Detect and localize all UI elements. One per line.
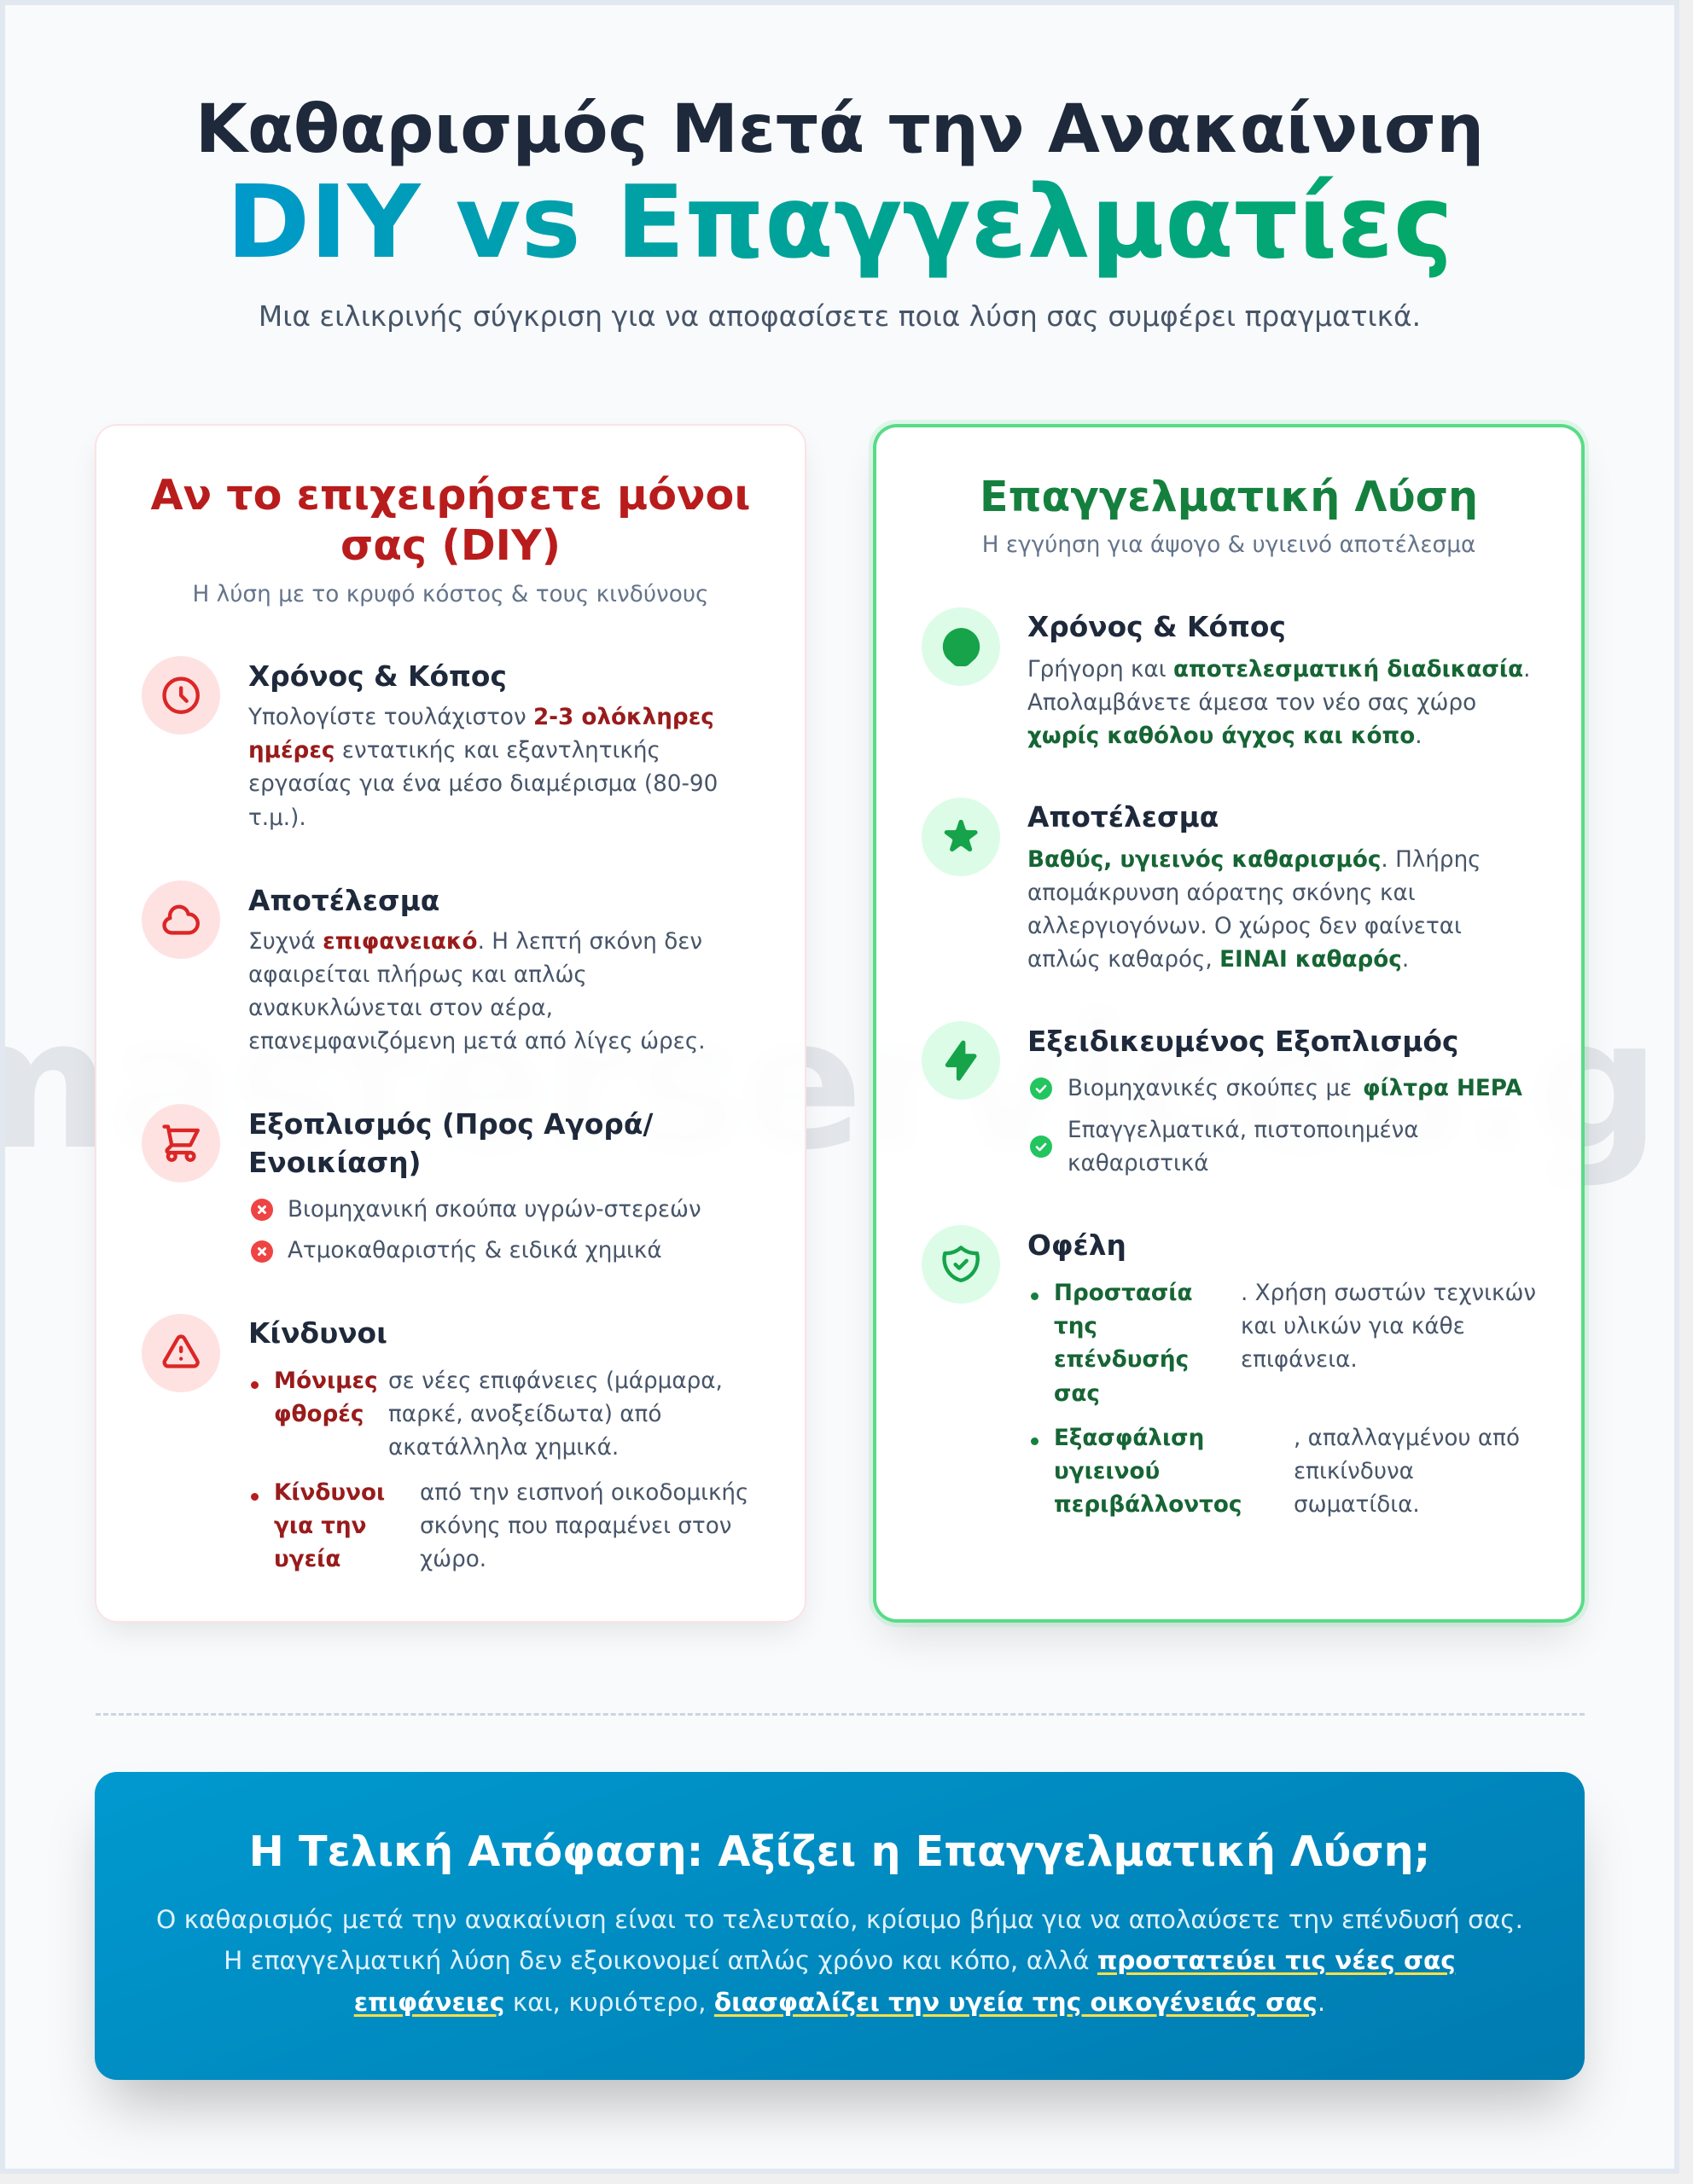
- text: result: απομάκρυνση αόρατης σκόνης και: [1027, 880, 1416, 906]
- callout text: επιφάνειες και, κυριότερο, διασφαλίζει την υγεία της οικογένειάς σας.: [354, 1988, 1325, 2017]
- bullet two: bold: για την: [274, 1513, 366, 1539]
- title: line one: Καθαρισμός Μετά την Ανακαίνιση: [195, 90, 1484, 168]
- heading: specialised equipment: Εξειδικευμένος Εξοπλισμός: [1027, 1025, 1458, 1058]
- bullet two: bold: περιβάλλοντος: [1054, 1492, 1242, 1518]
- bullet one: text: [1241, 1281, 1536, 1373]
- icon: shield: [922, 1225, 1000, 1304]
- heading: result: Αποτέλεσμα: [1027, 801, 1219, 834]
- bullet two: text: , απαλλαγμένου από: [1294, 1426, 1520, 1451]
- bullet one: text: [388, 1368, 723, 1461]
- heading: risks: Κίνδυνοι: [248, 1317, 387, 1350]
- text: result: [248, 928, 706, 1054]
- list item: certified detergents: [1068, 1118, 1419, 1176]
- bullet one: text: σε νέες επιφάνειες (μάρμαρα,: [388, 1368, 723, 1394]
- text: time and effort: [1027, 657, 1530, 749]
- text: result: επανεμφανιζόμενη μετά από λίγες ώρες.: [248, 1029, 706, 1054]
- text: result: [1027, 846, 1481, 973]
- text: time and effort: [248, 705, 718, 831]
- bullet two: text: από την εισπνοή οικοδομικής: [420, 1480, 748, 1506]
- icon: x two: [251, 1240, 273, 1263]
- text: time and effort: Απολαμβάνετε άμεσα τον νέο σας χώρο: [1027, 690, 1476, 716]
- icon: check two: [1030, 1136, 1052, 1158]
- bullet two: bold: [1054, 1426, 1242, 1518]
- bullet one: bold: της: [1054, 1314, 1097, 1339]
- icon: star: [922, 798, 1000, 876]
- icon: check one: [1030, 1077, 1052, 1100]
- heading: equipment: Ενοικίαση): [248, 1147, 422, 1179]
- heading: time and effort: Χρόνος & Κόπος: [1027, 611, 1286, 643]
- subtitle: Μια ειλικρινής σύγκριση για να αποφασίσετε ποια λύση σας συμφέρει πραγματικά.: [259, 300, 1421, 333]
- text: result: αφαιρείται πλήρως και απλώς: [248, 962, 587, 988]
- bullet two: text: σκόνης που παραμένει στον: [420, 1513, 731, 1539]
- icon: clock: [142, 656, 220, 735]
- bullet one: bold: [1054, 1281, 1193, 1407]
- panel: professional: φίλτρα HEPA: [1363, 1076, 1522, 1101]
- icon: x one: [251, 1199, 273, 1221]
- callout heading: Η Τελική Απόφαση: Αξίζει η Επαγγελματική Λύση;: [249, 1827, 1430, 1876]
- bullet one: bold: Προστασία: [1054, 1281, 1193, 1306]
- panel heading: professional: Επαγγελματική Λύση: [980, 472, 1478, 521]
- heading: equipment: Εξοπλισμός (Προς Αγορά/: [248, 1107, 653, 1140]
- icon: droplet: [922, 607, 1000, 686]
- heading: result: Αποτέλεσμα: [248, 884, 439, 916]
- panel: professional: [876, 427, 1581, 1619]
- panel heading: DIY: Αν το επιχειρήσετε μόνοι: [150, 469, 751, 519]
- text: time and effort: χωρίς καθόλου άγχος και κόπο.: [1027, 723, 1422, 749]
- heading: equipment: [248, 1107, 654, 1179]
- panel: DIY: [96, 426, 805, 1621]
- heading: time and effort: Χρόνος & Κόπος: [248, 660, 507, 693]
- callout text: [156, 1905, 1523, 2017]
- bullet two: bold: Εξασφάλιση: [1054, 1426, 1204, 1451]
- list item: HEPA vacuums: Βιομηχανικές σκούπες με: [1068, 1076, 1352, 1101]
- bullet one: text: επιφάνεια.: [1241, 1347, 1358, 1373]
- bullet two: text: σωματίδια.: [1294, 1492, 1420, 1518]
- panel subtitle: professional: Η εγγύηση για άψογο & υγιεινό αποτέλεσμα: [982, 532, 1475, 558]
- callout: final decision: [95, 1772, 1585, 2080]
- bullet one: bold: σας: [1054, 1381, 1100, 1407]
- panel heading: DIY: σας (DIY): [340, 520, 561, 570]
- bullet one: text: παρκέ, ανοξείδωτα) από: [388, 1402, 661, 1427]
- list item: certified detergents: καθαριστικά: [1068, 1151, 1209, 1176]
- text: result: αλλεργιογόνων. Ο χώρος δεν φαίνεται: [1027, 914, 1462, 939]
- text: result: ανακυκλώνεται στον αέρα,: [248, 996, 553, 1021]
- text: result: απλώς καθαρός, ΕΙΝΑΙ καθαρός.: [1027, 947, 1409, 973]
- text: time and effort: ημέρες εντατικής και εξαντλητικής: [248, 738, 660, 764]
- bullet one: bold: φθορές: [274, 1402, 364, 1427]
- list item: certified detergents: Επαγγελματικά, πιστοποιημένα: [1068, 1118, 1419, 1143]
- bullet two: bold: Κίνδυνοι: [274, 1480, 385, 1506]
- bullet one: bold: επένδυσής: [1054, 1347, 1189, 1373]
- bullet one: bold: Μόνιμες: [274, 1368, 378, 1394]
- bullet two: text: χώρο.: [420, 1547, 486, 1572]
- list item: vacuum: Βιομηχανική σκούπα υγρών-στερεών: [288, 1197, 701, 1223]
- heading: benefits: Οφέλη: [1027, 1228, 1126, 1261]
- text: result: Συχνά επιφανειακό. Η λεπτή σκόνη δεν: [248, 928, 702, 954]
- icon: warning: [142, 1314, 220, 1392]
- bullet one: [251, 1381, 259, 1389]
- bullet one: text: ακατάλληλα χημικά.: [388, 1435, 619, 1461]
- bullet two: bold: [274, 1480, 385, 1572]
- panel subtitle: DIY: Η λύση με το κρυφό κόστος & τους κινδύνους: [193, 582, 708, 607]
- title: gradient line two: DIY vs Επαγγελματίες: [226, 163, 1453, 281]
- callout text: Η επαγγελματική λύση δεν εξοικονομεί απλώς χρόνο και κόπο, αλλά προστατεύει τις νέες σας: [224, 1946, 1456, 1975]
- bullet two: [1031, 1438, 1038, 1445]
- bullet two: text: [1294, 1426, 1520, 1518]
- callout text: Ο καθαρισμός μετά την ανακαίνιση είναι το τελευταίο, κρίσιμο βήμα για να απολαύσετε την επένδυσή σας.: [156, 1905, 1523, 1934]
- text: time and effort: Υπολογίστε τουλάχιστον 2-3 ολόκληρες: [248, 705, 714, 730]
- bullet one: text: . Χρήση σωστών τεχνικών: [1241, 1281, 1536, 1306]
- bullet one: text: και υλικών για κάθε: [1241, 1314, 1465, 1339]
- bullet two: bold: υγιεινού: [1054, 1459, 1160, 1484]
- text: time and effort: Γρήγορη και αποτελεσματική διαδικασία.: [1027, 657, 1530, 682]
- bullet two: text: επικίνδυνα: [1294, 1459, 1414, 1484]
- bullet two: bold: υγεία: [274, 1547, 340, 1572]
- bullet one: [1031, 1292, 1038, 1300]
- panel heading: DIY: [150, 469, 751, 570]
- list item: HEPA vacuums: [1068, 1076, 1522, 1101]
- bullet two: text: [420, 1480, 748, 1572]
- bullet two: [251, 1493, 259, 1501]
- text: result: Βαθύς, υγιεινός καθαρισμός. Πλήρης: [1027, 846, 1481, 872]
- icon: cloud: [142, 880, 220, 959]
- icon: bolt: [922, 1021, 1000, 1100]
- text: time and effort: τ.μ.).: [248, 805, 306, 831]
- bullet one: bold: [274, 1368, 378, 1427]
- text: time and effort: εργασίας για ένα μέσο διαμέρισμα (80-90: [248, 771, 718, 797]
- list item: steam cleaner: Ατμοκαθαριστής & ειδικά χημικά: [288, 1238, 662, 1263]
- icon: cart: [142, 1104, 220, 1182]
